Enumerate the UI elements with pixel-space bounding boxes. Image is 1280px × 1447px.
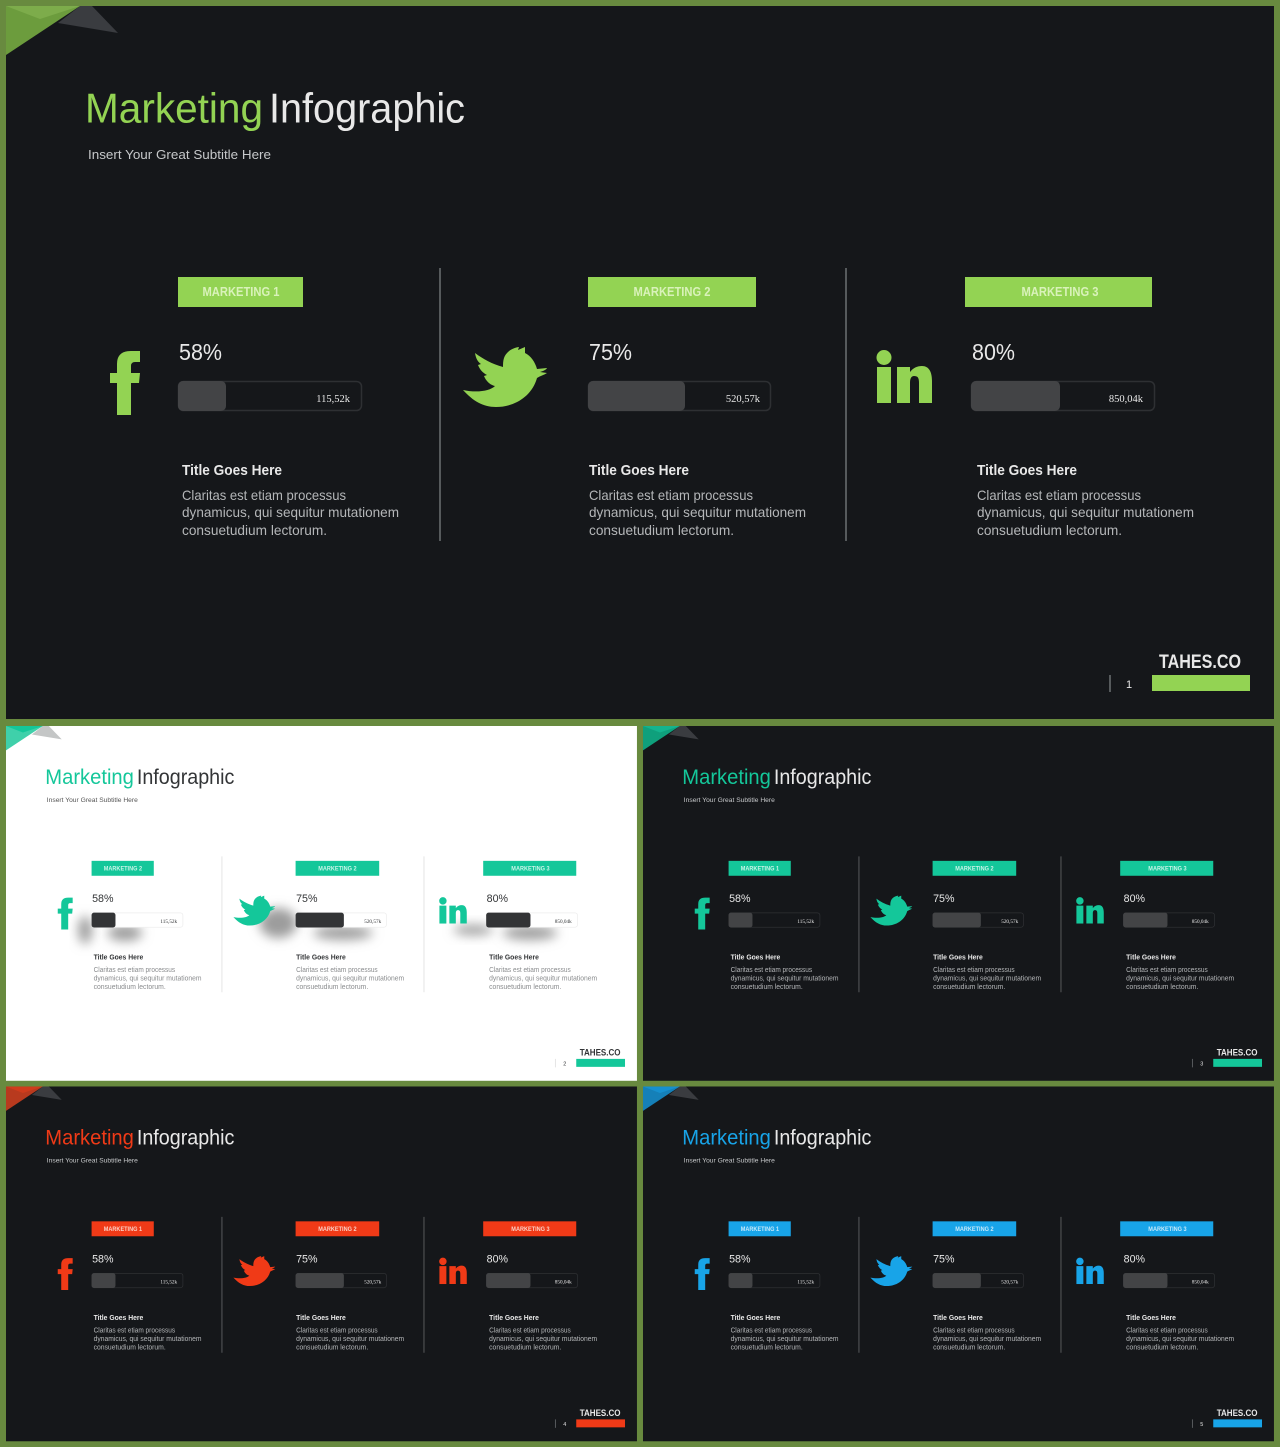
footer xyxy=(555,1047,625,1067)
text block 3: Claritas est etiam processus xyxy=(1126,1327,1208,1334)
text block 1 xyxy=(94,1313,202,1352)
text block 3 xyxy=(489,952,597,991)
text block 1 xyxy=(94,952,202,991)
text block 2 xyxy=(933,952,1041,991)
icon: linkedin xyxy=(439,1258,467,1284)
column: marketing 2 xyxy=(463,277,806,538)
badge xyxy=(296,861,379,876)
text block 3: consuetudium lectorum. xyxy=(1126,984,1198,991)
progress bar 3 xyxy=(971,381,1154,411)
footer xyxy=(1192,1047,1262,1067)
column: marketing 1 xyxy=(58,1221,202,1352)
badge xyxy=(92,861,154,876)
title xyxy=(45,1126,234,1149)
text block 3 xyxy=(1126,1313,1234,1352)
text block 1: dynamicus, qui sequitur mutationem xyxy=(182,504,399,520)
text block 3: Claritas est etiam processus xyxy=(1126,967,1208,974)
text block 3 xyxy=(977,462,1194,538)
progress bar 3: 850,04k xyxy=(1192,919,1209,925)
progress bar 3: 850,04k xyxy=(1109,394,1144,405)
badge: MARKETING 2 xyxy=(955,865,994,872)
text block 1: Title Goes Here xyxy=(94,952,143,961)
text block 3 xyxy=(489,1313,597,1352)
column: marketing 2 xyxy=(233,861,404,991)
column: marketing 1 xyxy=(695,861,839,991)
text block 2: Title Goes Here xyxy=(296,952,346,961)
panel: slide 3, dark teal theme xyxy=(643,726,1274,1081)
footer: TAHES.CO xyxy=(1159,652,1241,673)
percent 58: 58% xyxy=(179,339,222,365)
text block 1: dynamicus, qui sequitur mutationem xyxy=(731,975,839,982)
title xyxy=(85,84,465,132)
text block 3: Title Goes Here xyxy=(1126,1313,1176,1322)
footer: 3 xyxy=(1200,1061,1203,1067)
title: Infographic xyxy=(137,766,234,789)
progress bar 1: 115,52k xyxy=(160,1280,178,1286)
badge: MARKETING 3 xyxy=(1148,1226,1187,1233)
progress bar 1 xyxy=(729,913,820,928)
panel: main slide, green dark theme xyxy=(6,6,1274,719)
subtitle: Insert Your Great Subtitle Here xyxy=(47,1158,138,1165)
percent 58: 58% xyxy=(92,893,113,905)
text block 2: consuetudium lectorum. xyxy=(296,984,368,991)
column: marketing 1 xyxy=(110,277,399,538)
percent 58: 58% xyxy=(729,893,750,905)
text block 2 xyxy=(296,1313,404,1352)
text block 1: Title Goes Here xyxy=(731,952,780,961)
progress bar 2: 520,57k xyxy=(726,394,761,405)
icon: linkedin xyxy=(439,897,467,924)
text block 2: Claritas est etiam processus xyxy=(589,487,753,503)
footer: TAHES.CO xyxy=(1217,1408,1258,1419)
text block 2: Claritas est etiam processus xyxy=(296,1327,378,1334)
footer: TAHES.CO xyxy=(580,1408,621,1419)
text block 1: consuetudium lectorum. xyxy=(182,522,327,538)
percent 75: 75% xyxy=(933,1254,954,1266)
text block 1: Claritas est etiam processus xyxy=(94,967,176,974)
panel: slide 5, dark blue theme xyxy=(643,1086,1274,1441)
title: Marketing xyxy=(682,1126,771,1149)
progress bar 3 xyxy=(1123,1273,1214,1288)
badge xyxy=(92,1221,154,1236)
icon: linkedin xyxy=(1076,1258,1104,1284)
badge: MARKETING 2 xyxy=(318,1226,357,1233)
progress bar 2 xyxy=(933,913,1023,928)
column: marketing 1 xyxy=(58,861,202,991)
text block 1: Claritas est etiam processus xyxy=(94,1327,176,1334)
text block 1: Title Goes Here xyxy=(94,1313,143,1322)
panel: slide 4, dark red theme xyxy=(6,1086,637,1441)
title: Infographic xyxy=(269,84,465,132)
text block 3: consuetudium lectorum. xyxy=(1126,1345,1198,1352)
percent 80: 80% xyxy=(972,339,1015,365)
text block 3: Claritas est etiam processus xyxy=(489,967,571,974)
text block 1 xyxy=(182,462,399,538)
badge xyxy=(933,1221,1016,1236)
footer: 2 xyxy=(563,1061,566,1067)
badge xyxy=(296,1221,379,1236)
corner fold decoration xyxy=(6,1086,62,1111)
text block 2: Title Goes Here xyxy=(296,1313,346,1322)
badge: marketing 2: MARKETING 2 xyxy=(634,285,711,299)
text block 3: consuetudium lectorum. xyxy=(489,1345,561,1352)
column: marketing 3 xyxy=(439,1221,597,1352)
badge: MARKETING 2 xyxy=(104,865,143,872)
badge xyxy=(729,861,791,876)
percent 58: 58% xyxy=(729,1254,750,1266)
text block 1: dynamicus, qui sequitur mutationem xyxy=(731,1336,839,1343)
text block 2: consuetudium lectorum. xyxy=(933,984,1005,991)
progress bar 1 xyxy=(729,1273,820,1288)
text block 3 xyxy=(1126,952,1234,991)
text block 1 xyxy=(731,952,839,991)
percent 80: 80% xyxy=(487,1254,508,1266)
text block 2: dynamicus, qui sequitur mutationem xyxy=(933,975,1041,982)
text block 1: Title Goes Here xyxy=(731,1313,780,1322)
icon: twitter bird xyxy=(233,896,275,926)
badge: marketing 3: MARKETING 3 xyxy=(1022,285,1099,299)
progress bar 1 xyxy=(92,1273,183,1288)
badge xyxy=(933,861,1016,876)
title xyxy=(682,766,871,789)
badge: MARKETING 1 xyxy=(104,1226,143,1233)
column: marketing 2 xyxy=(870,1221,1041,1352)
text block 1: Claritas est etiam processus xyxy=(182,487,346,503)
progress bar 2 xyxy=(296,1273,386,1288)
footer: TAHES.CO xyxy=(580,1047,621,1058)
badge: marketing 2 xyxy=(588,277,756,307)
title: Marketing xyxy=(45,766,134,789)
progress bar 1: 115,52k xyxy=(316,394,351,405)
subtitle: Insert Your Great Subtitle Here xyxy=(684,1158,775,1165)
text block 3: Title Goes Here xyxy=(489,952,539,961)
text block 1 xyxy=(731,1313,839,1352)
progress bar 1: 115,52k xyxy=(797,919,815,925)
progress bar 1 xyxy=(178,381,362,411)
progress bar 3 xyxy=(1123,913,1214,928)
badge: MARKETING 2 xyxy=(955,1226,994,1233)
percent 75: 75% xyxy=(589,339,632,365)
corner fold decoration xyxy=(6,726,62,750)
text block 2: consuetudium lectorum. xyxy=(589,522,734,538)
icon: facebook xyxy=(695,898,710,930)
title xyxy=(682,1126,871,1149)
text block 2: Title Goes Here xyxy=(933,1313,983,1322)
footer xyxy=(555,1408,625,1428)
text block 2: dynamicus, qui sequitur mutationem xyxy=(296,975,404,982)
progress bar 1: 115,52k xyxy=(160,919,178,925)
percent 80: 80% xyxy=(1124,1254,1145,1266)
text block 3: Claritas est etiam processus xyxy=(977,487,1141,503)
icon: facebook xyxy=(58,898,73,930)
text block 1: dynamicus, qui sequitur mutationem xyxy=(94,1336,202,1343)
progress bar 1: 115,52k xyxy=(797,1280,815,1286)
percent 80: 80% xyxy=(487,893,508,905)
progress bar 2: 520,57k xyxy=(364,1280,382,1286)
progress bar 2: 520,57k xyxy=(1001,919,1019,925)
column: marketing 1 xyxy=(695,1221,839,1352)
icon: twitter bird xyxy=(233,1256,275,1286)
progress bar 3 xyxy=(486,1273,577,1288)
text block 1: Claritas est etiam processus xyxy=(731,967,813,974)
title: Marketing xyxy=(45,1126,134,1149)
footer: TAHES.CO xyxy=(1217,1047,1258,1058)
badge: MARKETING 3 xyxy=(511,865,550,872)
progress bar 2 xyxy=(933,1273,1023,1288)
badge: marketing 1 xyxy=(178,277,303,307)
badge xyxy=(1120,861,1213,876)
footer xyxy=(1192,1408,1262,1428)
column: marketing 3 xyxy=(1076,1221,1234,1352)
text block 2: dynamicus, qui sequitur mutationem xyxy=(589,504,806,520)
progress bar 2: 520,57k xyxy=(364,919,382,925)
badge xyxy=(1120,1221,1213,1236)
progress bar 3 xyxy=(486,913,577,928)
text block 2: dynamicus, qui sequitur mutationem xyxy=(296,1336,404,1343)
text block 3: dynamicus, qui sequitur mutationem xyxy=(489,1336,597,1343)
column: marketing 2 xyxy=(870,861,1041,991)
text block 1: dynamicus, qui sequitur mutationem xyxy=(94,975,202,982)
title: Infographic xyxy=(137,1126,234,1149)
icon: twitter bird xyxy=(870,896,912,926)
icon: facebook xyxy=(695,1258,710,1290)
subtitle: Insert Your Great Subtitle Here xyxy=(88,147,271,162)
corner fold decoration xyxy=(6,6,118,55)
footer xyxy=(1110,652,1250,692)
title: Infographic xyxy=(774,1126,871,1149)
text block 3: Title Goes Here xyxy=(1126,952,1176,961)
corner fold decoration xyxy=(643,1086,699,1111)
text block 2: Title Goes Here xyxy=(589,462,689,479)
column: marketing 3 xyxy=(1076,861,1234,991)
progress bar 2 xyxy=(588,381,770,411)
percent 75: 75% xyxy=(933,893,954,905)
text block 2: Title Goes Here xyxy=(933,952,983,961)
text block 3: consuetudium lectorum. xyxy=(977,522,1122,538)
percent 80: 80% xyxy=(1124,893,1145,905)
badge: marketing 3 xyxy=(965,277,1152,307)
text block 2: dynamicus, qui sequitur mutationem xyxy=(933,1336,1041,1343)
icon: twitter bird xyxy=(463,347,547,407)
percent 58: 58% xyxy=(92,1254,113,1266)
text block 2 xyxy=(296,952,404,991)
text block 3: dynamicus, qui sequitur mutationem xyxy=(489,975,597,982)
text block 3: dynamicus, qui sequitur mutationem xyxy=(1126,975,1234,982)
badge: MARKETING 3 xyxy=(511,1226,550,1233)
text block 3: Title Goes Here xyxy=(489,1313,539,1322)
progress bar 2 xyxy=(296,913,386,928)
text block 1: Title Goes Here xyxy=(182,462,282,479)
text block 1: consuetudium lectorum. xyxy=(731,1345,803,1352)
text block 2 xyxy=(933,1313,1041,1352)
title: Infographic xyxy=(774,766,871,789)
title xyxy=(45,766,234,789)
text block 2: consuetudium lectorum. xyxy=(296,1345,368,1352)
text block 2: Claritas est etiam processus xyxy=(933,967,1015,974)
badge xyxy=(483,861,576,876)
subtitle: Insert Your Great Subtitle Here xyxy=(684,797,775,804)
text block 1: consuetudium lectorum. xyxy=(731,984,803,991)
text block 2 xyxy=(589,462,806,538)
icon: twitter bird xyxy=(870,1256,912,1286)
progress bar 3: 850,04k xyxy=(555,919,572,925)
footer: 4 xyxy=(563,1422,566,1428)
progress bar 2: 520,57k xyxy=(1001,1280,1019,1286)
text block 2: Claritas est etiam processus xyxy=(933,1327,1015,1334)
text block 2: consuetudium lectorum. xyxy=(933,1345,1005,1352)
subtitle: Insert Your Great Subtitle Here xyxy=(47,797,138,804)
badge xyxy=(483,1221,576,1236)
badge: marketing 1: MARKETING 1 xyxy=(202,285,280,299)
badge: MARKETING 2 xyxy=(318,865,357,872)
title: Marketing xyxy=(85,84,263,132)
text block 3: dynamicus, qui sequitur mutationem xyxy=(977,504,1194,520)
badge: MARKETING 3 xyxy=(1148,865,1187,872)
footer: 1 xyxy=(1126,679,1132,691)
column: marketing 2 xyxy=(233,1221,404,1352)
progress bar 3: 850,04k xyxy=(1192,1280,1209,1286)
percent 75: 75% xyxy=(296,893,317,905)
text block 2: Claritas est etiam processus xyxy=(296,967,378,974)
icon: facebook xyxy=(110,351,140,415)
column: marketing 3 xyxy=(876,277,1194,538)
progress bar 1 xyxy=(92,913,183,928)
text block 3: dynamicus, qui sequitur mutationem xyxy=(1126,1336,1234,1343)
column: marketing 3 xyxy=(439,861,597,991)
text block 3: Claritas est etiam processus xyxy=(489,1327,571,1334)
text block 1: Claritas est etiam processus xyxy=(731,1327,813,1334)
icon: facebook xyxy=(58,1258,73,1290)
corner fold decoration xyxy=(643,726,699,750)
badge xyxy=(729,1221,791,1236)
panel: slide 2, white teal theme xyxy=(6,726,637,1081)
text block 3: Title Goes Here xyxy=(977,462,1077,479)
badge: MARKETING 1 xyxy=(741,865,780,872)
footer: 5 xyxy=(1200,1422,1203,1428)
text block 3: consuetudium lectorum. xyxy=(489,984,561,991)
text block 1: consuetudium lectorum. xyxy=(94,1345,166,1352)
icon: linkedin xyxy=(1076,897,1104,924)
icon: linkedin xyxy=(876,350,932,403)
progress bar 3: 850,04k xyxy=(555,1280,572,1286)
title: Marketing xyxy=(682,766,771,789)
text block 1: consuetudium lectorum. xyxy=(94,984,166,991)
badge: MARKETING 1 xyxy=(741,1226,780,1233)
percent 75: 75% xyxy=(296,1254,317,1266)
